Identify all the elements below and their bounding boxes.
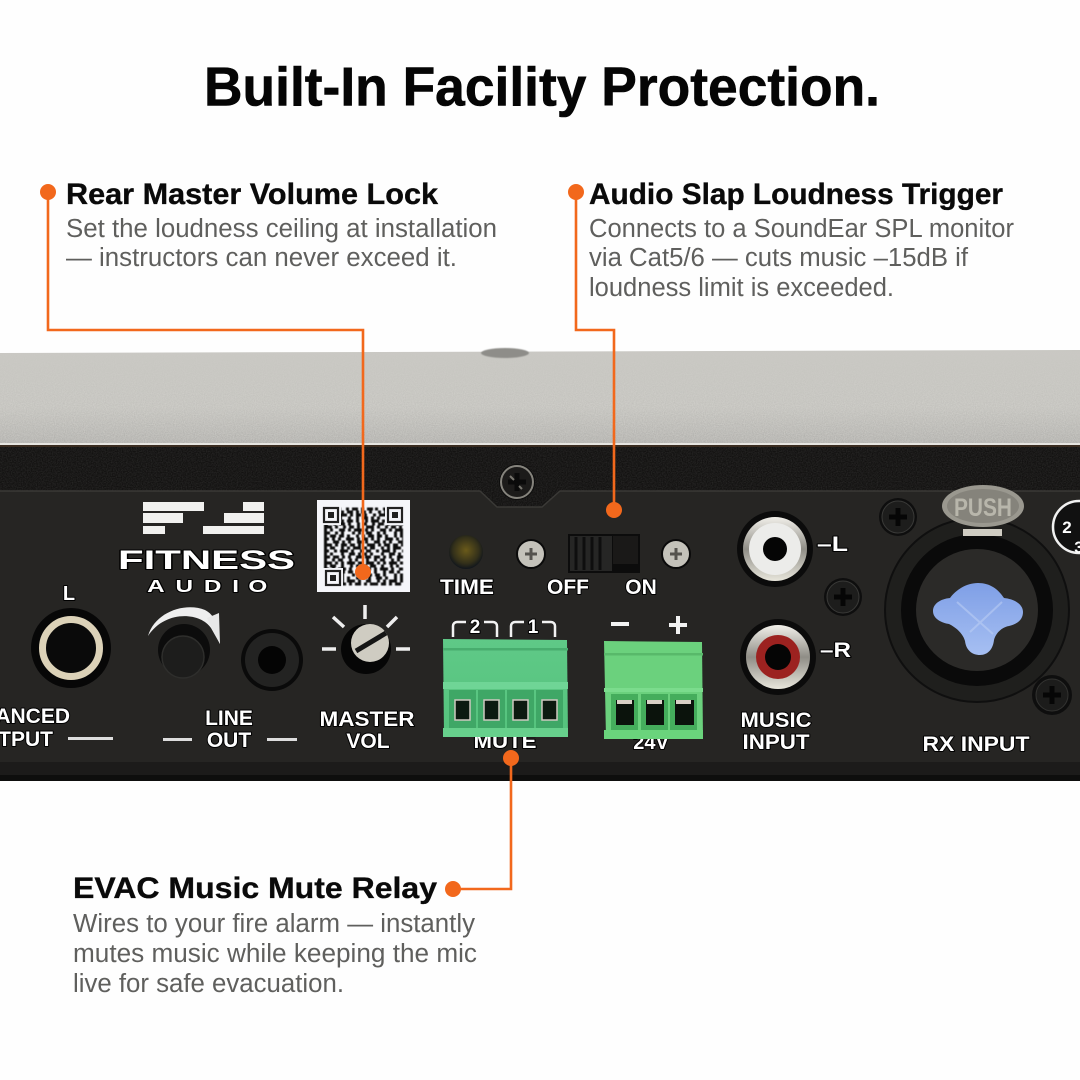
device dark front lip [0, 445, 1080, 509]
FITNESS AUDIO logo: AUDIO [147, 576, 267, 596]
label: music input: INPUT [742, 731, 810, 754]
label: music input [740, 709, 812, 754]
text block: audio slap loudness trigger: Audio Slap Loudness Trigger [589, 178, 1004, 211]
audio slap switch: ON [625, 576, 657, 599]
text block: EVAC music mute relay: mutes music while keeping the mic [73, 940, 477, 968]
device front panel [0, 491, 1080, 781]
screw: top centre [499, 464, 535, 500]
text block: audio slap loudness trigger [589, 178, 1014, 302]
XLR push tab [942, 485, 1024, 536]
text block: audio slap loudness trigger: Connects to a SoundEar SPL monitor [589, 215, 1014, 243]
mute terminal block: 1 [528, 617, 539, 638]
label: master vol: MASTER [320, 708, 414, 731]
RCA jack: music input L [737, 511, 848, 587]
label: music input: MUSIC [740, 709, 812, 732]
label: line out [163, 707, 297, 752]
jack: balanced output L: L [63, 583, 75, 605]
RCA jack: music input L: –L [817, 533, 848, 556]
RCA jack: music input R: –R [820, 639, 851, 662]
callout leader: EVAC music mute relay [445, 750, 519, 897]
text block: EVAC music mute relay: EVAC Music Mute Relay [73, 872, 438, 905]
device top lid [0, 348, 1080, 445]
XLR push tab: PUSH [954, 494, 1012, 522]
jack: line out [241, 629, 303, 691]
label: RX input: RX INPUT [922, 733, 1030, 756]
pin diagram circle [1053, 501, 1080, 557]
callout leader: audio slap loudness trigger [568, 184, 622, 518]
text block: rear master volume lock: — instructors can never exceed it. [66, 244, 457, 272]
FITNESS AUDIO logo: FITNESS [118, 545, 295, 575]
jack: balanced output L [31, 583, 111, 688]
mute terminal block: MUTE [474, 731, 536, 753]
QR code [317, 500, 410, 592]
XLR combo RX input connector [885, 518, 1069, 702]
time adjustment LED [440, 535, 494, 599]
label: line out: OUT [207, 729, 251, 752]
label: line out: LINE [205, 707, 253, 730]
text block: EVAC music mute relay: Wires to your fire alarm — instantly [73, 910, 475, 938]
RCA jack: music input R [740, 619, 851, 695]
text block: rear master volume lock [66, 178, 497, 272]
time adjustment LED: TIME [440, 576, 494, 599]
mute terminal block [443, 617, 568, 753]
callout leader: rear master volume lock [40, 184, 371, 580]
pin diagram circle: 2 [1062, 518, 1072, 537]
master volume dial [322, 605, 410, 674]
audio slap switch: OFF [547, 576, 589, 599]
text block: audio slap loudness trigger: via Cat5/6 — cuts music –15dB if [589, 244, 969, 272]
FITNESS AUDIO logo [118, 502, 295, 596]
knob with rotation arrow [148, 607, 220, 678]
device photo: rear panel of amplifier [0, 348, 1080, 781]
audio slap switch [517, 534, 690, 599]
24V terminal block: 24V [633, 732, 669, 754]
black panel screws [824, 498, 1072, 715]
title: Built-In Facility Protection. [204, 56, 880, 118]
text block: rear master volume lock: Rear Master Volume Lock [66, 178, 439, 211]
text block: EVAC music mute relay [73, 872, 477, 998]
label: master vol: VOL [346, 730, 390, 753]
24V terminal block [604, 616, 703, 754]
text block: audio slap loudness trigger: loudness limit is exceeded. [589, 274, 894, 302]
mute terminal block: 2 [470, 617, 480, 638]
label: master vol [320, 708, 414, 753]
text block: EVAC music mute relay: live for safe evacuation. [73, 970, 344, 998]
label: balanced output [0, 705, 113, 751]
text block: rear master volume lock: Set the loudness ceiling at installation [66, 215, 497, 243]
